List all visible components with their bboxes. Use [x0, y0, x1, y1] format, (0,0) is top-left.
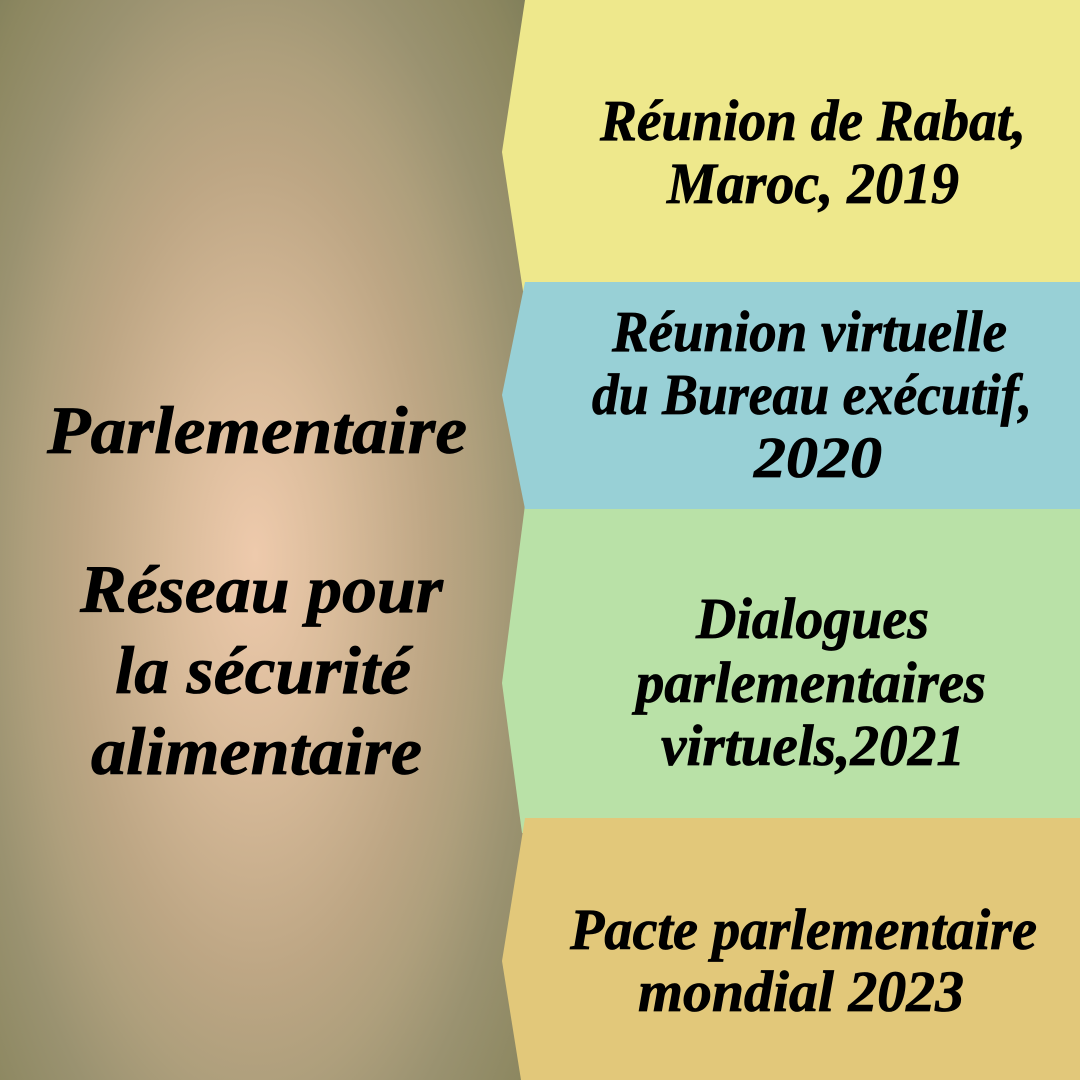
heading: network title: alimentaire	[91, 713, 422, 789]
heading: network title: la sécurité	[115, 632, 414, 708]
heading: Parlementaire: Parlementaire	[46, 392, 467, 468]
panel: green 2021	[502, 505, 1080, 833]
panel: blue 2020: 2020	[753, 425, 882, 490]
panel: Rabat 2019: Réunion de Rabat,	[599, 88, 1026, 153]
panel: blue 2020	[502, 282, 1080, 509]
panel: green 2021: Dialogues	[695, 586, 929, 651]
panel: green 2021: parlementaires	[631, 650, 986, 715]
heading: network title	[79, 551, 444, 789]
heading: network title: Réseau pour	[79, 551, 444, 627]
panel: orange 2023: Pacte parlementaire	[569, 897, 1037, 962]
panel: orange 2023	[502, 818, 1080, 1080]
panel: blue 2020: Réunion virtuelle	[611, 299, 1007, 364]
panel: Rabat 2019: Maroc, 2019	[666, 151, 959, 216]
panel: green 2021: virtuels,2021	[661, 713, 965, 778]
panel: Rabat 2019	[502, 0, 1080, 291]
panel: blue 2020: du Bureau exécutif,	[592, 362, 1032, 427]
panel: orange 2023: mondial 2023	[638, 959, 964, 1024]
